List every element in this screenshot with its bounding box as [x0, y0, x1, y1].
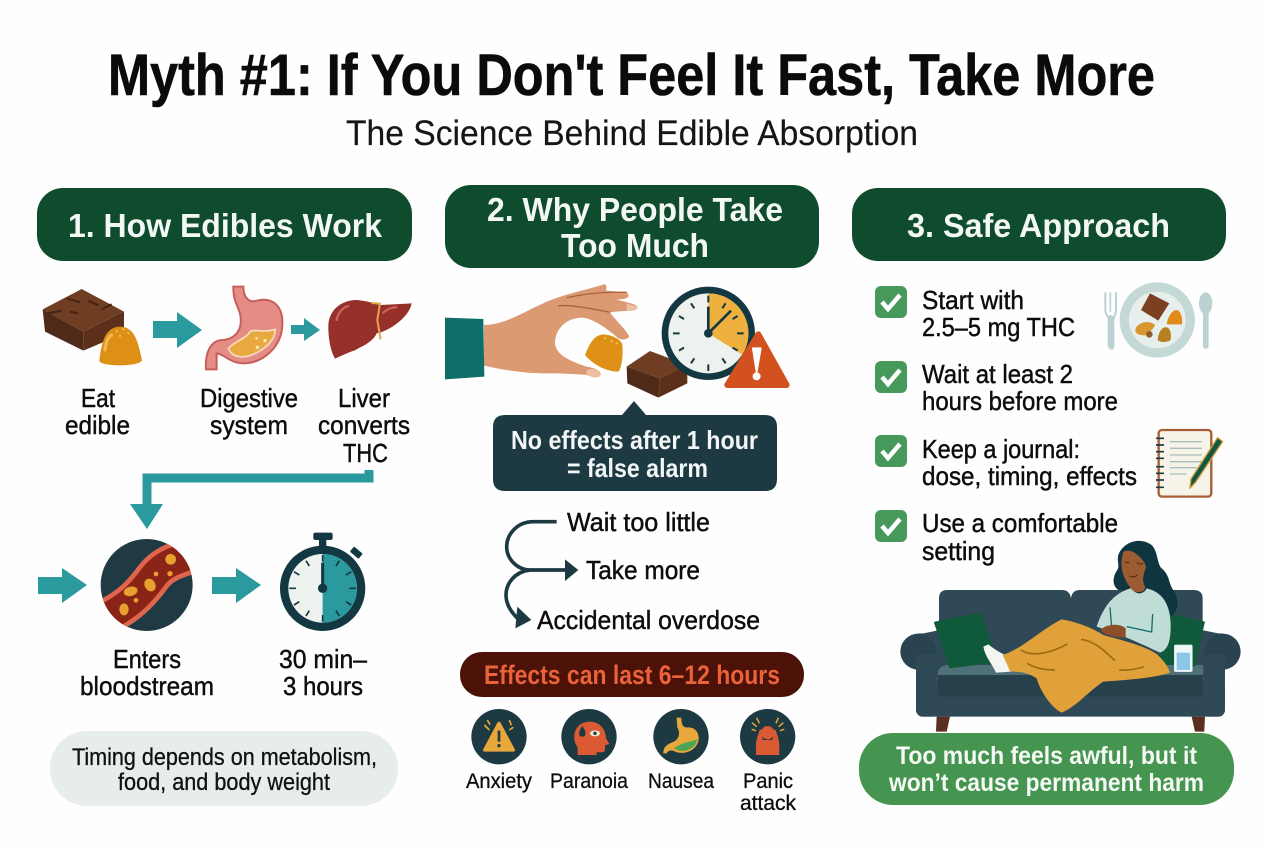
label: digestive system: Digestive	[200, 383, 298, 413]
callout: reassurance	[859, 733, 1234, 805]
icon: panic attack	[740, 709, 795, 764]
checklist item: setting	[875, 508, 1118, 566]
water glass	[1174, 645, 1192, 672]
checklist item: journal	[875, 434, 1137, 491]
label: panic attack: attack	[740, 792, 796, 815]
callout: reassurance: Too much feels awful, but it	[896, 742, 1198, 770]
subtitle: The Science Behind Edible Absorption	[346, 114, 918, 153]
icon: brownie and gummy	[43, 289, 142, 365]
callout: reassurance: won’t cause permanent harm	[888, 769, 1204, 797]
checklist item: wait: hours before more	[922, 386, 1118, 416]
hair and face	[1114, 541, 1178, 616]
arrow: liver down to bloodstream	[130, 470, 369, 529]
label: 30 min to 3 hours: 30 min–	[279, 644, 368, 674]
heading: why people take too much: 2. Why People Take	[487, 191, 783, 228]
label: eat edible	[65, 383, 130, 440]
arrow: edible to stomach	[153, 312, 202, 348]
label: liver converts THC: converts	[318, 410, 410, 440]
blanket	[1003, 619, 1170, 713]
checklist item: start low	[875, 285, 1075, 342]
label: paranoia: Paranoia	[550, 770, 628, 793]
label: enters bloodstream	[80, 644, 214, 701]
arrow: stomach to liver	[291, 318, 320, 341]
sweater	[1097, 588, 1171, 653]
label: nausea: Nausea	[648, 770, 714, 793]
icon: plate with edibles	[1105, 282, 1212, 358]
label: liver converts THC	[318, 383, 410, 468]
icon: paranoia	[561, 709, 617, 764]
checklist item: wait	[875, 359, 1118, 416]
icon: stomach	[206, 287, 282, 369]
icon: liver	[328, 300, 412, 359]
heading: why people take too much	[445, 185, 819, 268]
callout: false alarm	[493, 401, 777, 491]
hand	[1101, 625, 1126, 638]
checklist item: journal: Keep a journal:	[922, 434, 1080, 464]
label: digestive system: system	[210, 410, 288, 440]
icon: clock	[662, 287, 755, 380]
callout: timing factors: food, and body weight	[118, 769, 330, 796]
checklist item: setting: setting	[922, 536, 995, 566]
icon: bloodstream	[100, 539, 197, 631]
icon: brownie	[627, 351, 687, 398]
label: eat edible: edible	[65, 410, 130, 440]
heading: safe approach	[852, 188, 1226, 261]
callout: timing factors	[50, 731, 398, 806]
label: enters bloodstream: bloodstream	[80, 671, 214, 701]
callout: false alarm: = false alarm	[567, 453, 708, 483]
icon: warning triangle	[727, 334, 787, 385]
label: liver converts THC: Liver	[338, 383, 390, 413]
pillows	[935, 614, 997, 667]
panel: how edibles work	[37, 188, 412, 806]
illustration: person relaxing on sofa	[900, 541, 1241, 732]
heading: how edibles work	[37, 188, 412, 261]
panel: why people take too much	[445, 185, 819, 815]
checklist item: journal: dose, timing, effects	[922, 461, 1137, 491]
label: eat edible: Eat	[81, 383, 116, 413]
label: digestive system	[200, 383, 298, 440]
label: panic attack	[740, 770, 796, 815]
checklist item: start low: Start with	[922, 285, 1024, 315]
text: wait too little: Wait too little	[567, 507, 710, 537]
icon: hand picking gummy	[445, 284, 638, 379]
heading: safe approach: 3. Safe Approach	[907, 207, 1170, 244]
label: liver converts THC: THC	[343, 438, 388, 468]
diagram: overdose cycle arrows	[506, 522, 578, 628]
banner: effects duration	[460, 652, 804, 697]
icon: journal and pen	[1156, 430, 1223, 497]
heading: why people take too much: Too Much	[561, 227, 709, 264]
heading: how edibles work: 1. How Edibles Work	[68, 207, 383, 244]
label: anxiety: Anxiety	[466, 770, 532, 793]
label: 30 min to 3 hours: 3 hours	[283, 671, 363, 701]
icon: anxiety	[471, 709, 527, 764]
checklist item: wait: Wait at least 2	[922, 359, 1073, 389]
callout: timing factors: Timing depends on metabolism,	[72, 744, 377, 771]
callout: false alarm: No effects after 1 hour	[511, 425, 758, 455]
label: enters bloodstream: Enters	[113, 644, 181, 674]
label: panic attack: Panic	[743, 770, 793, 793]
text: take more: Take more	[586, 555, 700, 585]
checklist item: start low: 2.5–5 mg THC	[922, 312, 1075, 342]
banner: effects duration: Effects can last 6–12 hours	[484, 660, 780, 690]
icon: stopwatch	[280, 533, 365, 631]
panel: safe approach	[852, 188, 1241, 805]
arrow: into bloodstream	[38, 568, 87, 603]
checklist item: setting: Use a comfortable	[922, 508, 1118, 538]
icon: nausea	[653, 709, 709, 764]
arrow: bloodstream to timer	[212, 568, 261, 603]
label: 30 min to 3 hours	[279, 644, 368, 701]
sock	[983, 644, 1012, 673]
sofa	[900, 590, 1241, 732]
text: accidental overdose: Accidental overdose	[537, 605, 760, 635]
